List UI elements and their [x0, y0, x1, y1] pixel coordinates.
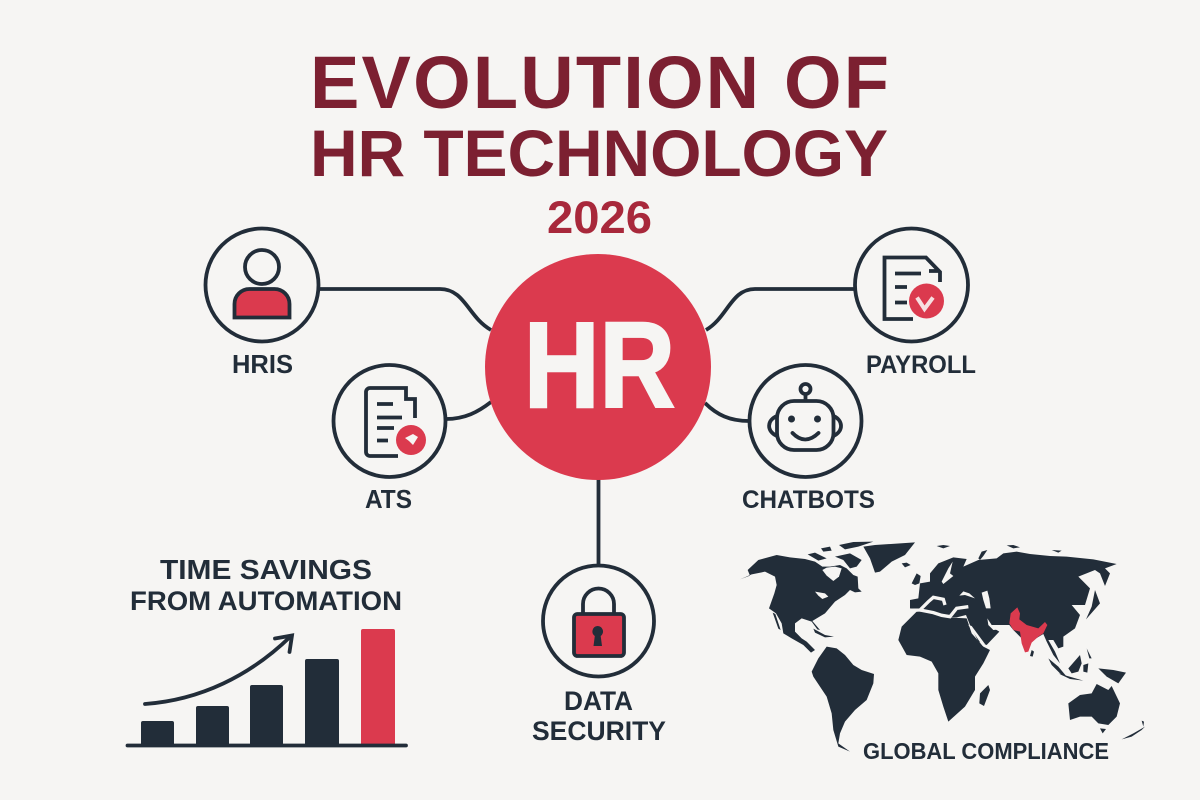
- subtitle: year: 2026: [547, 192, 652, 243]
- connector lines: [319, 289, 855, 566]
- icon: person: [206, 228, 318, 342]
- heading: time savings from automation: TIME SAVINGS: [160, 554, 372, 585]
- icon: resume document: [334, 365, 446, 477]
- arrow: upward trend: [145, 636, 292, 704]
- bar chart: [128, 629, 406, 746]
- title: EVOLUTION OF: [310, 41, 889, 124]
- title: [310, 41, 889, 190]
- label: Chatbots: CHATBOTS: [742, 486, 875, 514]
- label: Data Security: [532, 686, 666, 746]
- title: HR TECHNOLOGY: [310, 116, 888, 190]
- label: Data Security: DATA: [564, 686, 633, 716]
- label: global compliance: GLOBAL COMPLIANCE: [863, 738, 1109, 764]
- label: Payroll: PAYROLL: [866, 351, 976, 379]
- icon: payroll document: [855, 228, 968, 342]
- node: Data Security: [532, 566, 666, 746]
- node: Payroll: [855, 228, 976, 379]
- panel: time savings: [128, 554, 406, 746]
- icon: padlock: [543, 566, 654, 676]
- central HR hub: [485, 254, 711, 480]
- node: ATS: [334, 365, 446, 514]
- central HR hub: HR: [524, 297, 675, 433]
- label: ATS: ATS: [365, 484, 412, 514]
- panel: global compliance: [740, 542, 1145, 764]
- heading: time savings from automation: FROM AUTOMATION: [130, 586, 402, 616]
- label: HRIS: HRIS: [232, 349, 293, 379]
- world map: [740, 542, 1145, 752]
- highlight: India: [1009, 607, 1047, 652]
- node: HRIS: [206, 228, 318, 379]
- icon: robot: [750, 365, 862, 477]
- label: Data Security: SECURITY: [532, 716, 666, 746]
- heading: time savings from automation: [130, 554, 402, 616]
- node: Chatbots: [742, 365, 875, 514]
